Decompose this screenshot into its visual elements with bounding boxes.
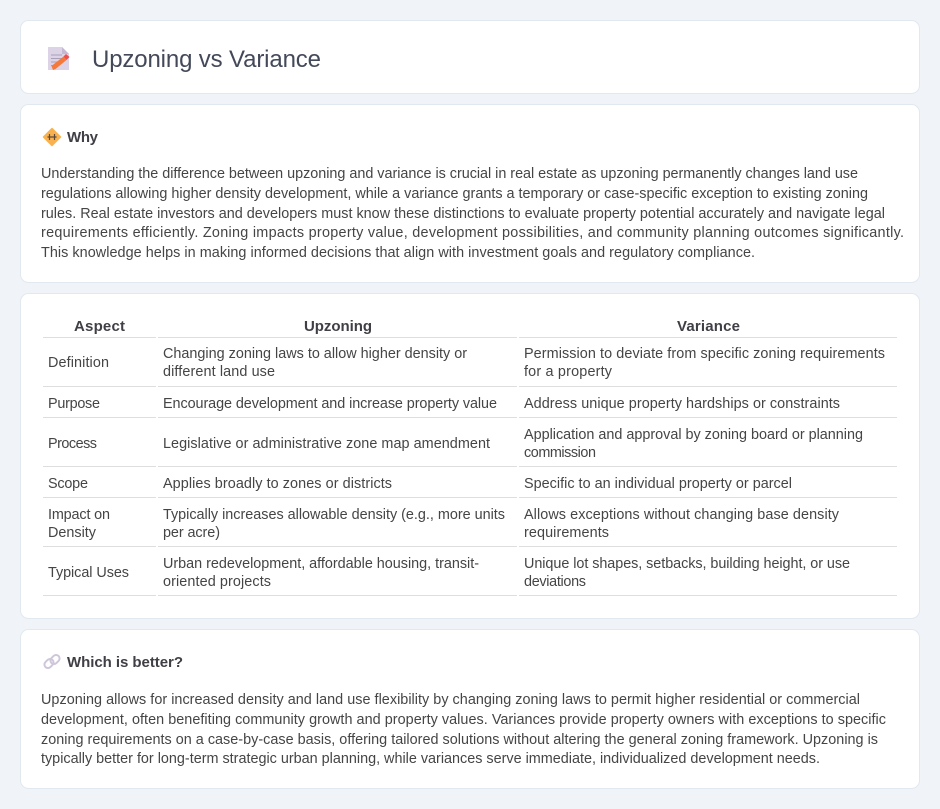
- row: impact on density: Typically increases allowable density (e.g., more units: [163, 507, 505, 523]
- text block: why paragraph: requirements efficiently. Zoning impacts property value, development possibilities, and community planning outcomes significantly.: [41, 225, 904, 241]
- panel: comparison table: [20, 294, 920, 618]
- row: definition: different land use: [163, 364, 275, 380]
- row: purpose: Address unique property hardships or constraints: [524, 396, 840, 412]
- row: process: commission: [524, 445, 596, 461]
- row: impact on density: requirements: [524, 525, 609, 541]
- row: scope: Applies broadly to zones or districts: [163, 476, 392, 492]
- text block: why paragraph: regulations allowing higher density development, while a variance grants a temporary or case-specific exception to existing zoning: [41, 186, 868, 202]
- row: definition: Changing zoning laws to allow higher density or: [163, 346, 467, 362]
- panel: which is better: [20, 630, 920, 788]
- row: definition: [43, 346, 897, 387]
- icon: chain link: [43, 653, 61, 670]
- text block: why paragraph: [41, 166, 904, 261]
- table header row: Upzoning: [304, 318, 372, 335]
- row: scope: Scope: [48, 476, 88, 492]
- row: process: Process: [48, 436, 97, 452]
- row: typical uses: Typical Uses: [48, 565, 129, 581]
- row: definition: Permission to deviate from specific zoning requirements: [524, 346, 885, 362]
- text block: which paragraph: development, often benefiting community growth and property values. Variances provide property owners with exceptions to specific: [41, 712, 886, 728]
- row: purpose: Encourage development and increase property value: [163, 396, 497, 412]
- icon: warning diamond: [44, 128, 60, 146]
- row: impact on density: [43, 507, 897, 547]
- text block: which paragraph: [41, 692, 886, 767]
- table header row: [43, 318, 897, 338]
- text block: which paragraph: Upzoning allows for increased density and land use flexibility by changing zoning laws to permit higher residential or commercial: [41, 692, 860, 708]
- row: purpose: Purpose: [48, 396, 100, 412]
- row: definition: Definition: [48, 355, 109, 371]
- row: scope: [43, 476, 897, 498]
- panel: why: [20, 104, 920, 282]
- row: typical uses: Urban redevelopment, affordable housing, transit-: [163, 556, 479, 572]
- row: impact on density: Allows exceptions without changing base density: [524, 507, 840, 523]
- text block: why paragraph: rules. Real estate investors and developers must know these distinctions to evaluate property potential accurately and navigate legal: [41, 206, 885, 222]
- row: process: Application and approval by zoning board or planning: [524, 427, 863, 443]
- row: typical uses: oriented projects: [163, 574, 271, 590]
- row: typical uses: deviations: [524, 574, 586, 590]
- panel: header: [20, 20, 920, 94]
- text block: which paragraph: zoning requirements on a case-by-case basis, offering tailored solutions without altering the general zoning framework. Upzoning is: [41, 732, 878, 748]
- row: impact on density: per acre): [163, 525, 220, 541]
- row: typical uses: Unique lot shapes, setbacks, building height, or use: [524, 556, 850, 572]
- row: process: [43, 427, 897, 467]
- text block: why paragraph: Understanding the difference between upzoning and variance is crucial in real estate as upzoning permanently changes land use: [41, 166, 858, 182]
- heading: which is better: Which is better?: [67, 654, 183, 671]
- text block: why paragraph: This knowledge helps in making informed decisions that align with investment goals and regulatory compliance.: [41, 245, 755, 261]
- row: purpose: [43, 396, 897, 418]
- title: Upzoning vs Variance: [92, 46, 321, 73]
- heading: why: Why: [67, 129, 99, 146]
- row: scope: Specific to an individual property or parcel: [524, 476, 792, 492]
- icon: document with pencil: [48, 47, 70, 70]
- table header row: Variance: [677, 318, 740, 335]
- text block: which paragraph: typically better for long-term strategic urban planning, while variances serve immediate, individualized development needs.: [41, 751, 820, 767]
- row: impact on density: Density: [48, 525, 97, 541]
- row: definition: for a property: [524, 364, 613, 380]
- row: typical uses: [43, 556, 897, 596]
- row: process: Legislative or administrative zone map amendment: [163, 436, 490, 452]
- row: impact on density: Impact on: [48, 507, 110, 523]
- table header row: Aspect: [74, 318, 125, 335]
